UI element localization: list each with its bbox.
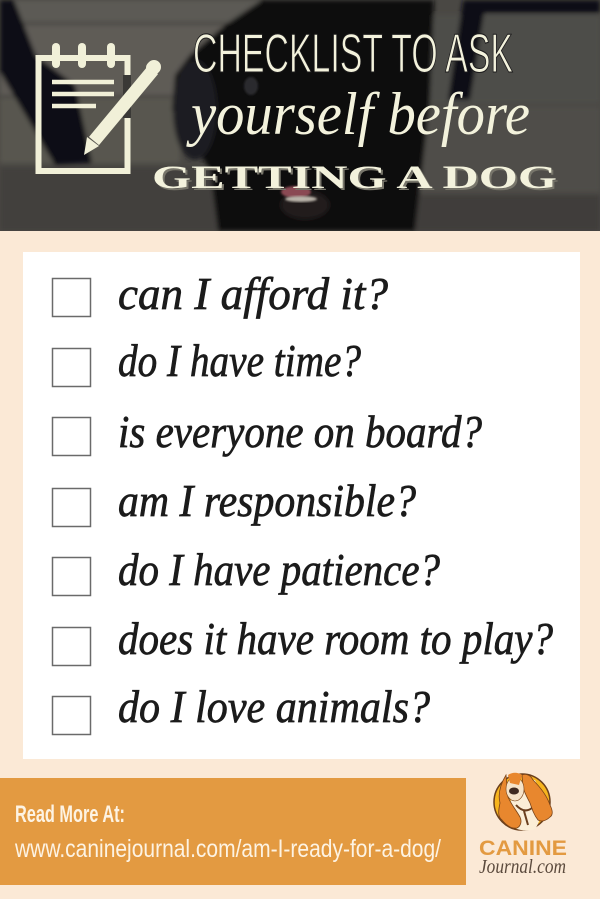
title line: yourself before: yourself before [185, 81, 530, 147]
checklist item: do I have patience?: do I have patience? [118, 544, 440, 595]
logo wordmark: Journal.com: Journal.com [479, 856, 566, 878]
footer banner: read more: www.caninejournal.com/am-I-ready-for-a-dog/ [14, 835, 441, 863]
header photo: dog on wooden deck [0, 0, 600, 231]
footer banner: read more: Read More At: [15, 801, 125, 828]
title line: getting a dog: GETTING A DOG [152, 160, 557, 196]
checklist item: can I afford it?: can I afford it? [118, 268, 388, 319]
checklist item: do I have time? [52, 335, 361, 386]
checklist item: am I responsible?: am I responsible? [118, 475, 416, 526]
logo: Canine Journal basset hound [479, 773, 567, 878]
footer banner: read more [0, 778, 466, 885]
title line: getting a dog: GETTING A DOG [154, 162, 559, 198]
panel: checklist [23, 252, 580, 759]
icon: notepad and pencil [38, 47, 154, 171]
checklist item: does it have room to play?: does it have room to play? [118, 613, 553, 664]
title line: getting a dog [152, 160, 559, 198]
checklist item: is everyone on board?: is everyone on board? [118, 406, 482, 457]
logo wordmark: Canine: CANINE [479, 837, 567, 860]
checklist item: do I love animals?: do I love animals? [118, 681, 430, 732]
checklist item: do I have time?: do I have time? [118, 335, 361, 386]
